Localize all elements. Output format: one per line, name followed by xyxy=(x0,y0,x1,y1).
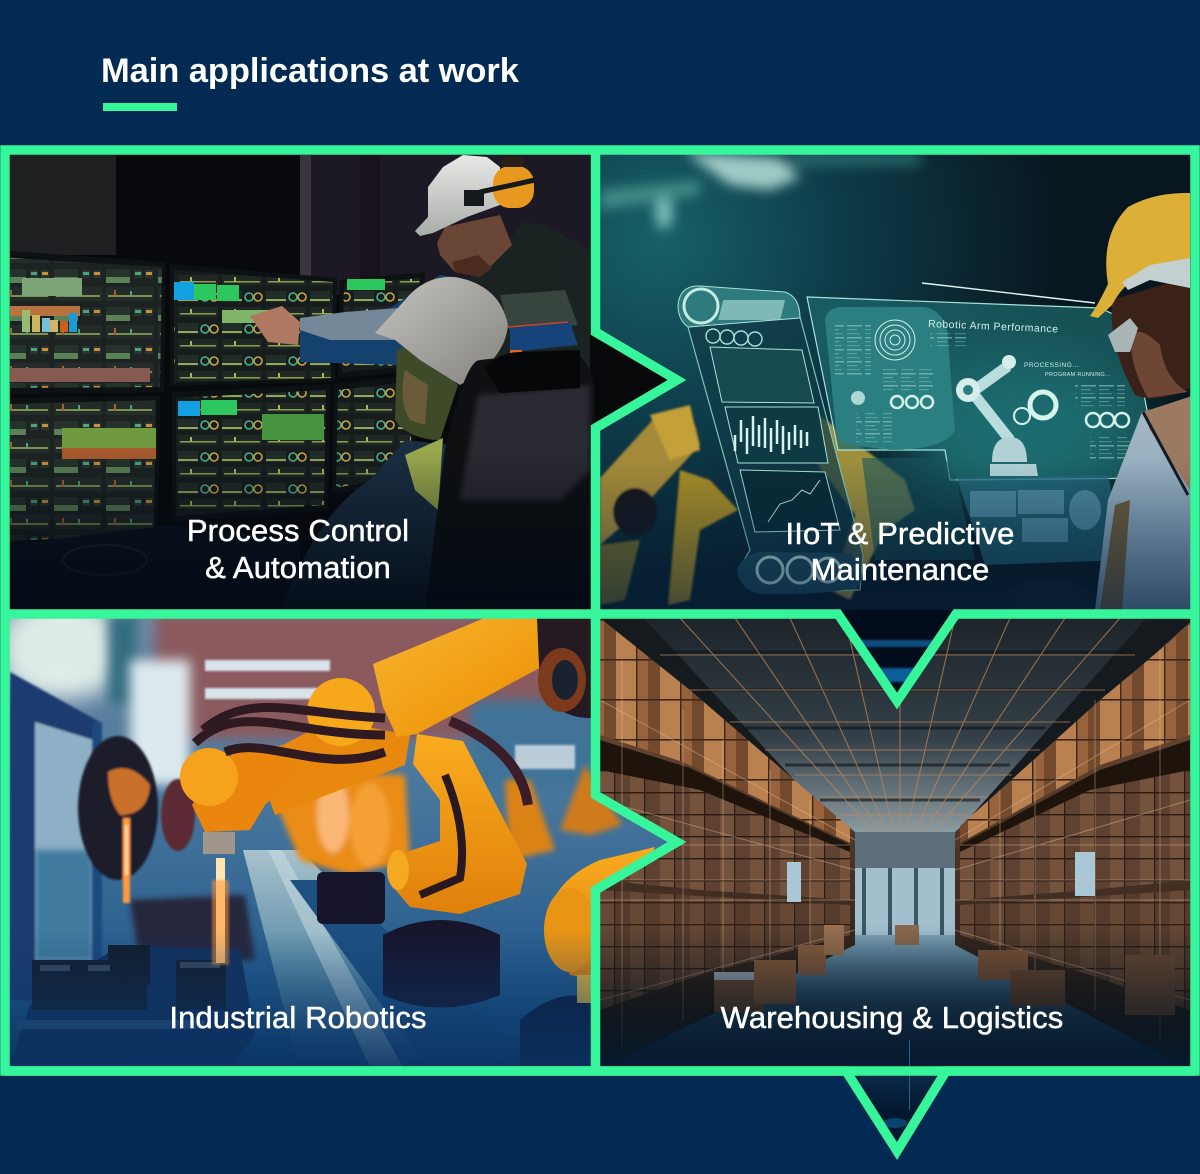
right robot head xyxy=(544,847,655,1003)
welding beam xyxy=(216,858,225,963)
standing engineer xyxy=(250,155,640,440)
hazy factory light xyxy=(7,605,117,695)
panel: industrial robotics xyxy=(5,605,685,1074)
warehouse floor xyxy=(636,935,1156,1052)
label: IIoT and predictive maintenance: IIoT & Predictive xyxy=(786,516,1014,551)
panel: process control and automation xyxy=(5,150,685,620)
hologram screen xyxy=(807,283,1160,480)
hologram robot arm icon xyxy=(972,366,1010,440)
left machine frame xyxy=(10,672,102,1000)
robot head xyxy=(180,708,385,965)
panel: IIoT and predictive maintenance xyxy=(595,150,1195,702)
panel: warehousing and logistics xyxy=(595,614,1195,1151)
lower arm of main robot xyxy=(270,728,410,815)
desk xyxy=(10,525,300,609)
label: process control and automation: Process Control xyxy=(187,513,409,548)
background robots xyxy=(270,765,622,875)
label: IIoT and predictive maintenance: Maintenance xyxy=(811,552,989,587)
label: warehousing and logistics: Warehousing & Logistics xyxy=(721,1000,1063,1035)
conveyor xyxy=(243,850,400,1032)
warehouse ceiling xyxy=(640,614,1150,840)
screen glow xyxy=(910,360,1130,500)
left shelves xyxy=(595,618,855,1071)
hologram tablet xyxy=(678,286,863,594)
hologram screen: Robotic Arm Performance xyxy=(928,319,1059,335)
assembly machinery xyxy=(10,895,255,1064)
robot bases xyxy=(317,872,595,1071)
warehouse far wall xyxy=(855,832,955,868)
floor boxes xyxy=(714,925,1175,1015)
cable loop robot xyxy=(78,736,195,903)
title accent bar xyxy=(103,103,177,111)
hologram screen: PROCESSING... xyxy=(1024,362,1079,369)
label: process control and automation: & Automation xyxy=(205,550,391,585)
title heading: Main applications at work xyxy=(101,52,520,90)
v pointer tip shade xyxy=(841,610,953,692)
hologram screen: PROGRAM RUNNING... xyxy=(1045,372,1111,378)
right shelves xyxy=(955,618,1195,1071)
yellow robots xyxy=(600,405,915,605)
robot wrist mechanism xyxy=(537,618,595,718)
lower holo panel xyxy=(862,458,975,560)
mid robot xyxy=(387,721,528,914)
pointer tip fade xyxy=(855,1076,937,1142)
office chair xyxy=(425,350,596,609)
monitors xyxy=(10,251,425,548)
warehouse far window xyxy=(855,868,955,935)
console xyxy=(957,475,1125,565)
seated engineer xyxy=(280,277,508,609)
robot joint xyxy=(307,678,375,746)
label: industrial robotics: Industrial Robotics xyxy=(169,1000,427,1035)
ceiling lights xyxy=(600,152,920,229)
warehouse grid overlay xyxy=(600,650,1190,1050)
engineer xyxy=(1090,193,1190,610)
main robot upper arm xyxy=(373,618,540,737)
red factory backdrop xyxy=(155,614,595,739)
arrow shadow xyxy=(595,332,677,428)
